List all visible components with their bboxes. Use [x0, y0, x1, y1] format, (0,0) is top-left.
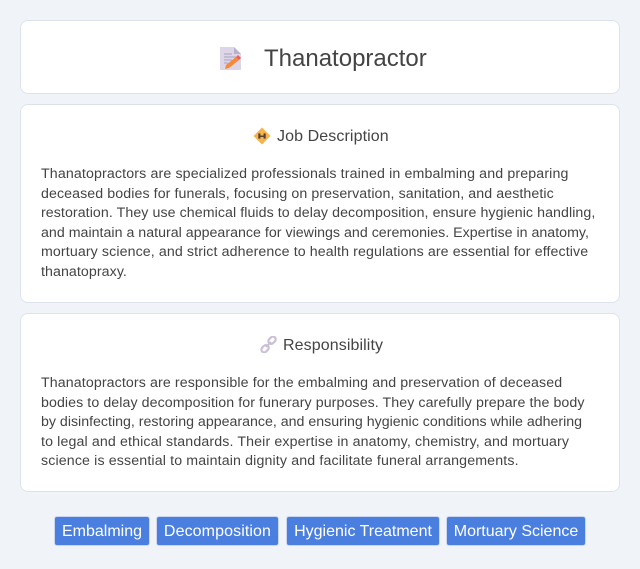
heading: responsibility: Responsibility	[283, 337, 383, 354]
panel: responsibility	[20, 313, 620, 492]
text: by disinfecting, restoring appearance, and ensuring hygienic conditions while adhering	[41, 414, 582, 430]
text: to legal and ethical standards. Their expertise in anatomy, chemistry, and mortuary	[41, 434, 569, 450]
tag: mortuary science	[446, 516, 586, 546]
tag: embalming	[54, 516, 150, 546]
panel: job description	[20, 104, 620, 303]
text: science is essential to maintain dignity and facilitate funeral arrangements.	[41, 453, 519, 469]
heading: job description: Job Description	[277, 128, 389, 145]
icon: diamond sign	[254, 128, 270, 144]
title: Thanatopractor	[264, 45, 427, 72]
text: and maintain a natural appearance for viewings and ceremonies. Expertise in anatomy,	[41, 225, 589, 241]
tag: decomposition	[156, 516, 279, 546]
text: restoration. They use chemical fluids to delay decomposition, ensure hygienic handling,	[41, 205, 595, 221]
text: deceased bodies for funerals, focusing on preservation, sanitation, and aesthetic	[41, 186, 554, 202]
text: responsibility body	[41, 375, 585, 469]
text: Thanatopractors are specialized professionals trained in embalming and preparing	[41, 166, 569, 182]
tag: hygienic treatment: Hygienic Treatment	[294, 523, 432, 540]
panel: title card	[20, 20, 620, 94]
icon: chain link	[260, 336, 277, 353]
text: thanatopraxy.	[41, 264, 127, 280]
text: mortuary science, and strict adherence to health regulations are essential for effective	[41, 244, 588, 260]
tag: mortuary science: Mortuary Science	[454, 523, 578, 540]
tags row	[54, 516, 586, 546]
tag: decomposition: Decomposition	[164, 523, 271, 540]
text: job description body	[41, 166, 595, 280]
tag: embalming: Embalming	[62, 523, 142, 540]
text: bodies to delay decomposition for funerary purposes. They carefully prepare the body	[41, 395, 585, 411]
text: Thanatopractors are responsible for the embalming and preservation of deceased	[41, 375, 562, 391]
icon: document with pencil	[220, 47, 241, 70]
tag: hygienic treatment	[286, 516, 440, 546]
